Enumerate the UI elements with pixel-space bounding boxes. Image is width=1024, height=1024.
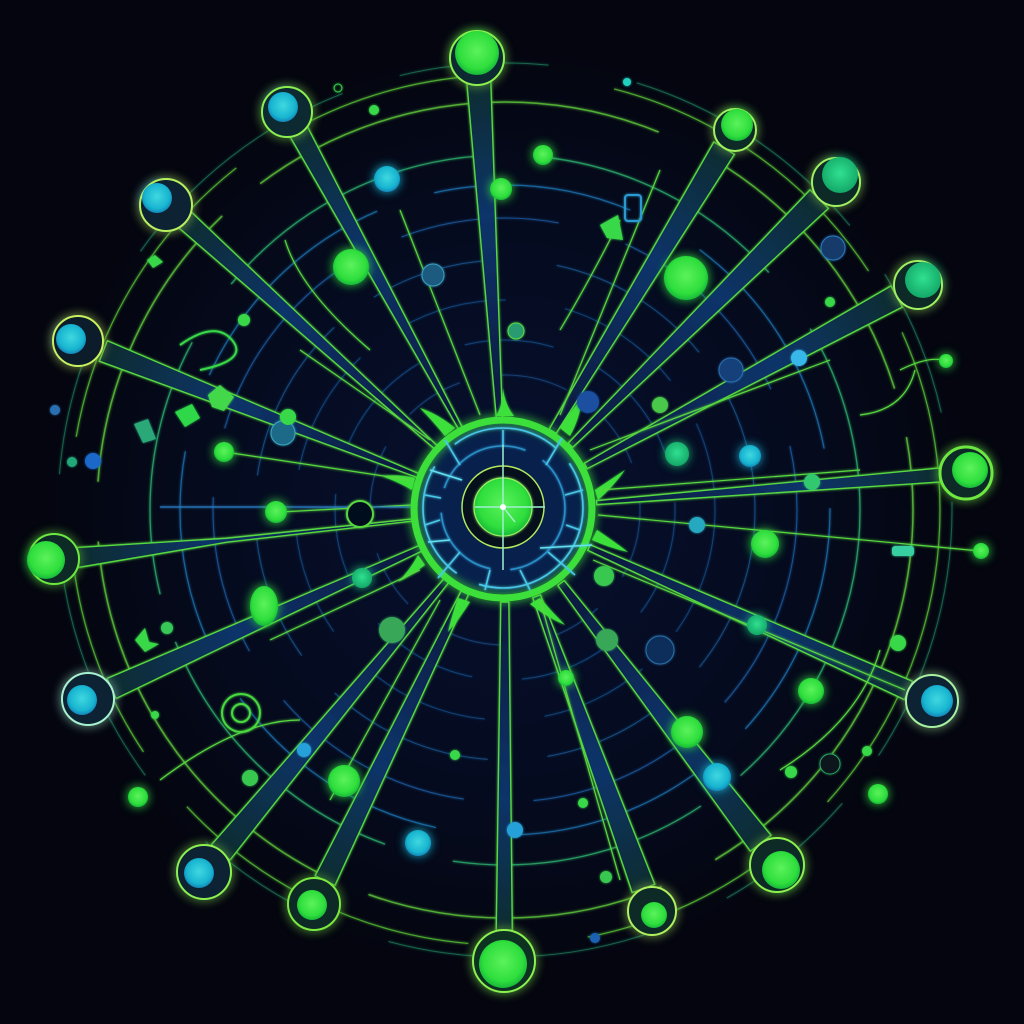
- spoke 14: [580, 286, 902, 476]
- node green: [250, 586, 278, 626]
- floating nodes: [128, 145, 989, 856]
- spokes: [77, 80, 940, 930]
- hub green ring: [414, 420, 592, 598]
- spoke 13: [596, 468, 940, 510]
- node green: [751, 530, 779, 558]
- spoke 1: [467, 80, 511, 419]
- end node 12: [906, 675, 958, 727]
- node green: [558, 670, 574, 686]
- node green: [533, 145, 553, 165]
- end node 3: [140, 179, 192, 231]
- hub core: [474, 478, 532, 536]
- end node 2: [262, 87, 312, 137]
- node cyan: [405, 830, 431, 856]
- spoke 8: [315, 588, 475, 885]
- spoke 11: [551, 575, 771, 851]
- node cyan: [739, 445, 761, 467]
- spoke 15: [561, 190, 828, 455]
- node green: [214, 442, 234, 462]
- spoke 9: [496, 602, 513, 930]
- node green: [671, 716, 703, 748]
- spoke 6: [107, 538, 426, 698]
- hub dark band: [462, 466, 544, 548]
- spoke 5: [77, 511, 415, 567]
- node green: [490, 178, 512, 200]
- spoke 7: [212, 573, 455, 860]
- spoke 4: [99, 341, 424, 486]
- spoke 2: [289, 126, 470, 434]
- spoke 12: [585, 538, 913, 700]
- end node 13: [940, 447, 992, 499]
- spoke 16: [542, 142, 734, 438]
- node green: [798, 678, 824, 704]
- node green: [973, 543, 989, 559]
- node green: [128, 787, 148, 807]
- node green: [328, 765, 360, 797]
- node green: [665, 442, 689, 466]
- end node 5: [27, 534, 79, 584]
- hub disc: [417, 422, 589, 594]
- end node 7: [177, 845, 231, 899]
- node green: [664, 256, 708, 300]
- node green: [868, 784, 888, 804]
- node cyan: [374, 166, 400, 192]
- spoke 10: [525, 592, 655, 893]
- end node 8: [288, 878, 340, 930]
- node cyan: [703, 763, 731, 791]
- node teal: [747, 615, 767, 635]
- node green: [265, 501, 287, 523]
- end node 9: [473, 930, 535, 992]
- node green: [333, 249, 369, 285]
- concentric rings: [58, 63, 952, 957]
- end node 10: [628, 887, 676, 935]
- end node 6: [62, 673, 114, 725]
- end node 11: [750, 838, 804, 892]
- node green: [939, 354, 953, 368]
- end node 15: [812, 157, 860, 206]
- hub crosshair: [475, 445, 545, 570]
- central hub: [414, 420, 592, 598]
- spoke 3: [178, 212, 444, 456]
- hub base flares: [382, 388, 628, 632]
- end node 16: [714, 109, 756, 151]
- end node 4: [53, 316, 103, 366]
- small floating fragments: [50, 78, 914, 943]
- hub circuit rings: [423, 428, 592, 590]
- thin secondary lines: [160, 170, 980, 880]
- end node 1: [450, 31, 504, 85]
- end node 14: [894, 261, 942, 309]
- node green: [352, 568, 372, 588]
